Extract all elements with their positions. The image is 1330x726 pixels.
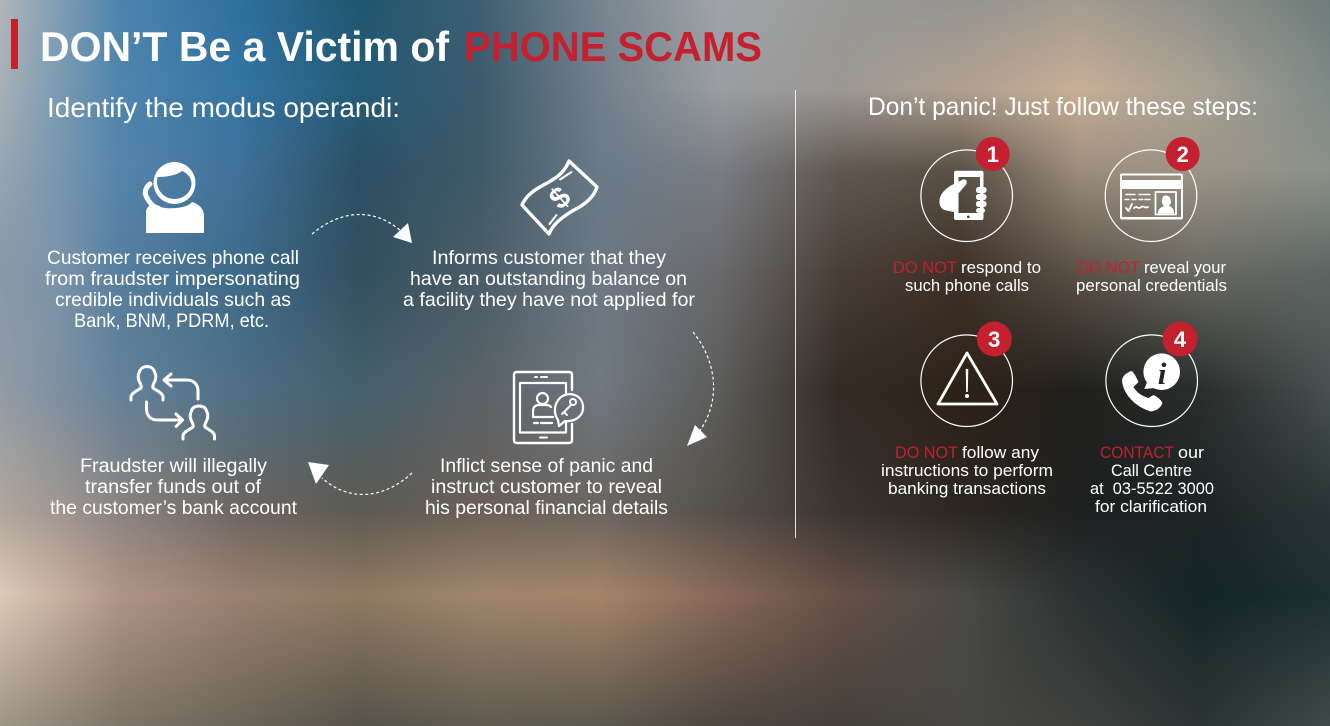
icon: banknote: $: [543, 180, 578, 216]
title: [40, 23, 762, 70]
step 4: contact call centre: our: [1178, 443, 1204, 462]
text: step three: Inflict sense of panic and: [440, 455, 653, 477]
panel: advice steps: [881, 137, 1227, 516]
step 2: do not reveal credentials: reveal your: [1144, 258, 1226, 277]
step 1: do not respond: DO NOT: [893, 258, 957, 277]
text: step one: Customer receives phone call: [47, 247, 299, 269]
text: step four: Fraudster will illegally: [80, 455, 267, 477]
icon: tablet with key bubble: [514, 372, 583, 443]
title accent bar: [11, 19, 18, 69]
text: step one: credible individuals such as: [55, 289, 291, 311]
step 3: do not follow instructions: banking transactions: [888, 479, 1046, 498]
step 4: contact call centre: [1090, 322, 1214, 516]
text: step four: transfer funds out of: [85, 476, 262, 498]
step 2: do not reveal credentials: DO NOT: [1077, 258, 1140, 277]
text: step one: Bank, BNM, PDRM, etc.: [74, 310, 269, 332]
step 3: do not follow instructions: [881, 322, 1053, 498]
step 3: do not follow instructions: DO NOT: [895, 443, 958, 462]
arrow: step two to three: [687, 332, 714, 446]
heading: follow these steps: Don’t panic! Just follow these steps:: [868, 93, 1258, 121]
text: step three: instruct customer to reveal: [431, 476, 662, 498]
arrow: step one to two: [312, 214, 412, 243]
title: DON’T Be a Victim of: [40, 23, 450, 70]
step 4: contact call centre: at 03-5522 3000: [1090, 479, 1214, 498]
step 2: do not reveal credentials: [1076, 137, 1227, 295]
step 1: do not respond: respond to: [961, 258, 1041, 277]
step 2: do not reveal credentials: 2: [1177, 142, 1189, 167]
text: step three: his personal financial details: [425, 497, 668, 519]
text: step four: [50, 455, 298, 519]
text: step two: Informs customer that they: [432, 247, 666, 269]
text: step two: have an outstanding balance on: [410, 268, 687, 290]
step 2: do not reveal credentials: personal credentials: [1076, 276, 1227, 295]
step 4: contact call centre: i: [1158, 356, 1167, 391]
text: step one: [45, 247, 300, 332]
step 3: do not follow instructions: follow any: [962, 443, 1039, 462]
icon: banknote: [522, 161, 597, 234]
step 1: do not respond: 1: [987, 142, 999, 167]
step 4: contact call centre: Call Centre: [1111, 461, 1192, 480]
text: step four: the customer’s bank account: [50, 497, 298, 519]
step 1: do not respond: such phone calls: [905, 276, 1029, 295]
heading: modus operandi: Identify the modus operandi:: [47, 92, 400, 123]
text: step three: [425, 455, 668, 519]
text: step two: [403, 247, 695, 311]
step 3: do not follow instructions: 3: [988, 327, 1000, 352]
step 4: contact call centre: 4: [1174, 327, 1187, 352]
panel: modus operandi steps: [45, 161, 714, 519]
icon: fund transfer between people: [131, 366, 214, 439]
text: step one: from fraudster impersonating: [45, 268, 300, 290]
arrow: step three to four: [308, 462, 412, 494]
vertical divider: [795, 90, 796, 538]
icon: customer on phone: [145, 162, 204, 233]
step 4: contact call centre: CONTACT: [1100, 443, 1174, 462]
step 1: do not respond: [893, 137, 1041, 295]
text: step two: a facility they have not applied for: [403, 289, 695, 311]
step 4: contact call centre: for clarification: [1095, 497, 1207, 516]
step 3: do not follow instructions: instructions to perform: [881, 461, 1053, 480]
title: PHONE SCAMS: [464, 23, 762, 70]
